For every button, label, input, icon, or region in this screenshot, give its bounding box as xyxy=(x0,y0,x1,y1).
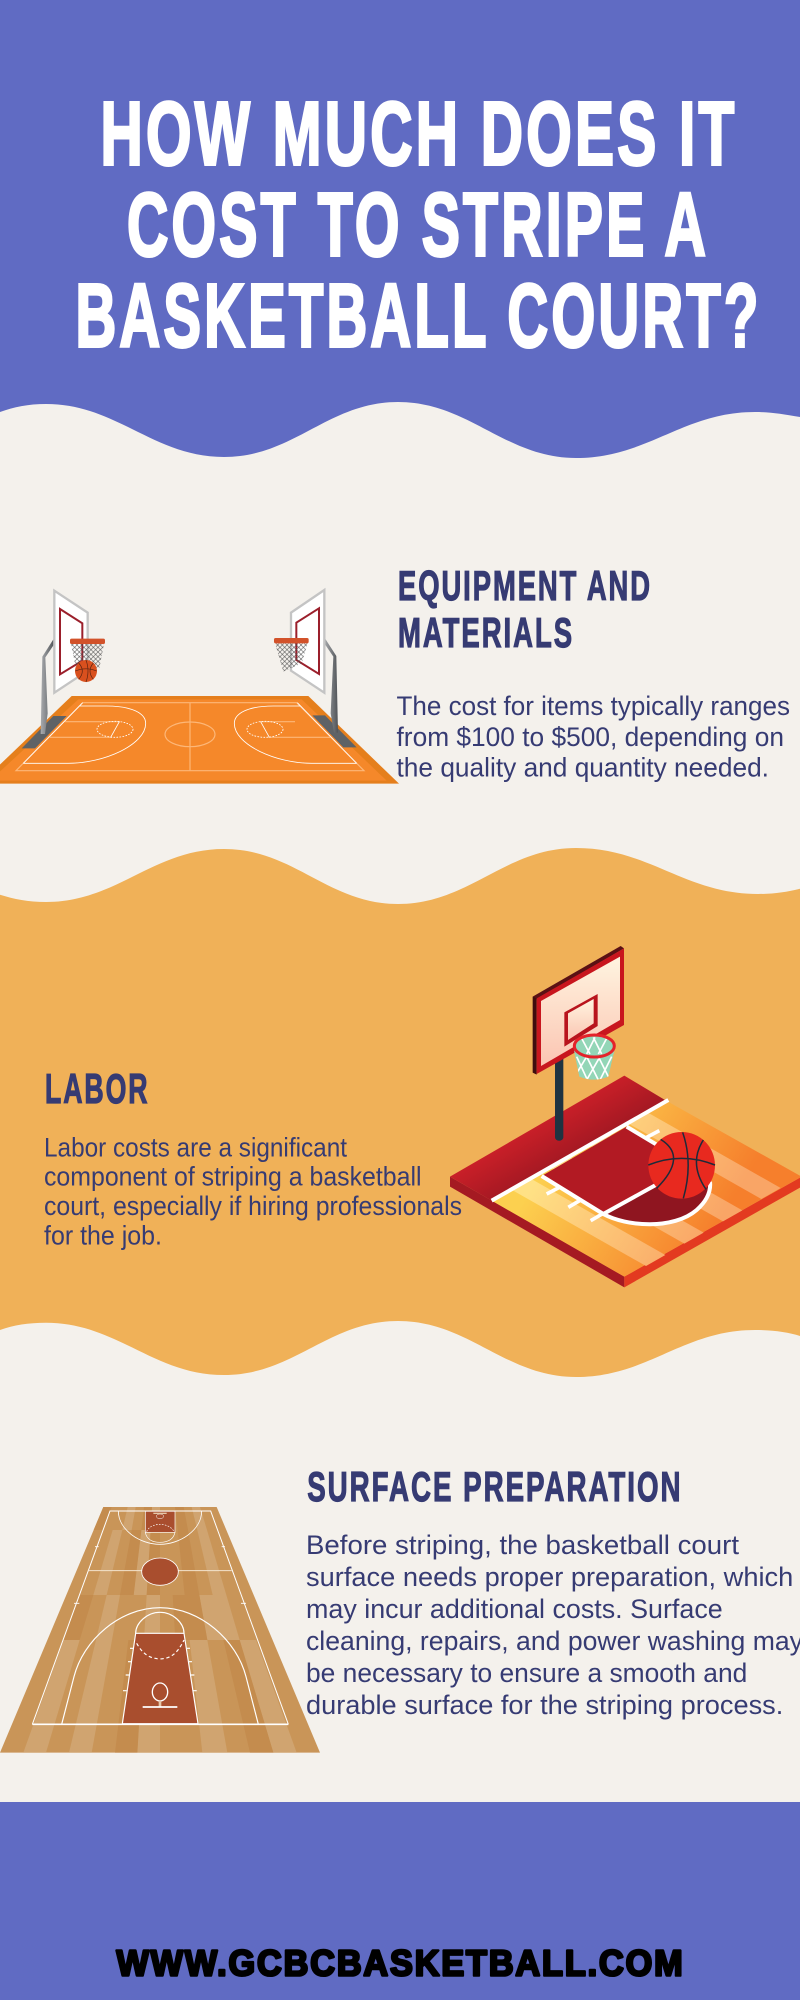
illustration: orange basketball court with two hoops xyxy=(0,590,399,784)
right hoop stand xyxy=(312,638,357,747)
left backboard xyxy=(54,591,88,693)
backboard xyxy=(533,946,624,1075)
text: surface preparation: cleaning, repairs, and power washing may xyxy=(306,1626,800,1656)
heading: equipment and materials: MATERIALS xyxy=(398,609,574,656)
text: equipment and materials xyxy=(396,691,790,783)
far key xyxy=(145,1511,175,1542)
painted key xyxy=(492,1100,712,1225)
text: surface preparation: may incur additional costs. Surface xyxy=(306,1594,723,1624)
footer band xyxy=(0,1802,800,2000)
text: labor xyxy=(44,1133,462,1250)
left net and rim xyxy=(70,639,105,668)
court lines xyxy=(32,1511,288,1724)
wood floor xyxy=(0,1507,320,1753)
text: equipment and materials: from $100 to $500, depending on xyxy=(396,722,784,752)
illustration: wood court in perspective xyxy=(0,1507,320,1753)
text: surface preparation: durable surface for the striping process. xyxy=(306,1690,783,1720)
text: labor: component of striping a basketball xyxy=(44,1162,422,1192)
title xyxy=(76,84,762,366)
heading: equipment and materials xyxy=(398,562,652,656)
header band with wave xyxy=(0,0,800,458)
ball xyxy=(75,660,97,682)
text: surface preparation: surface needs proper preparation, which xyxy=(306,1562,793,1592)
near key xyxy=(122,1612,198,1724)
text: labor: for the job. xyxy=(44,1220,162,1250)
right backboard xyxy=(291,590,324,693)
left hoop stand xyxy=(22,639,67,748)
ball xyxy=(648,1132,715,1199)
center circle xyxy=(142,1558,178,1585)
text: equipment and materials: The cost for items typically ranges xyxy=(396,691,790,721)
heading: labor: LABOR xyxy=(45,1065,150,1112)
court base xyxy=(450,1076,800,1287)
text: surface preparation: Before striping, the basketball court xyxy=(306,1530,740,1560)
footer url: WWW.GCBCBASKETBALL.COM xyxy=(116,1942,684,1984)
net and rim xyxy=(574,1035,614,1080)
orange wave band xyxy=(0,848,800,1377)
right net and rim xyxy=(274,638,309,672)
text: surface preparation: be necessary to ensure a smooth and xyxy=(306,1658,747,1688)
pole xyxy=(555,1058,563,1141)
text: surface preparation xyxy=(306,1530,800,1720)
text: labor: court, especially if hiring professionals xyxy=(44,1191,462,1221)
illustration: isometric red court with hoop and ball xyxy=(450,946,800,1287)
heading: equipment and materials: EQUIPMENT AND xyxy=(398,562,652,609)
text: equipment and materials: the quality and quantity needed. xyxy=(396,753,769,783)
text: labor: Labor costs are a significant xyxy=(44,1133,347,1163)
